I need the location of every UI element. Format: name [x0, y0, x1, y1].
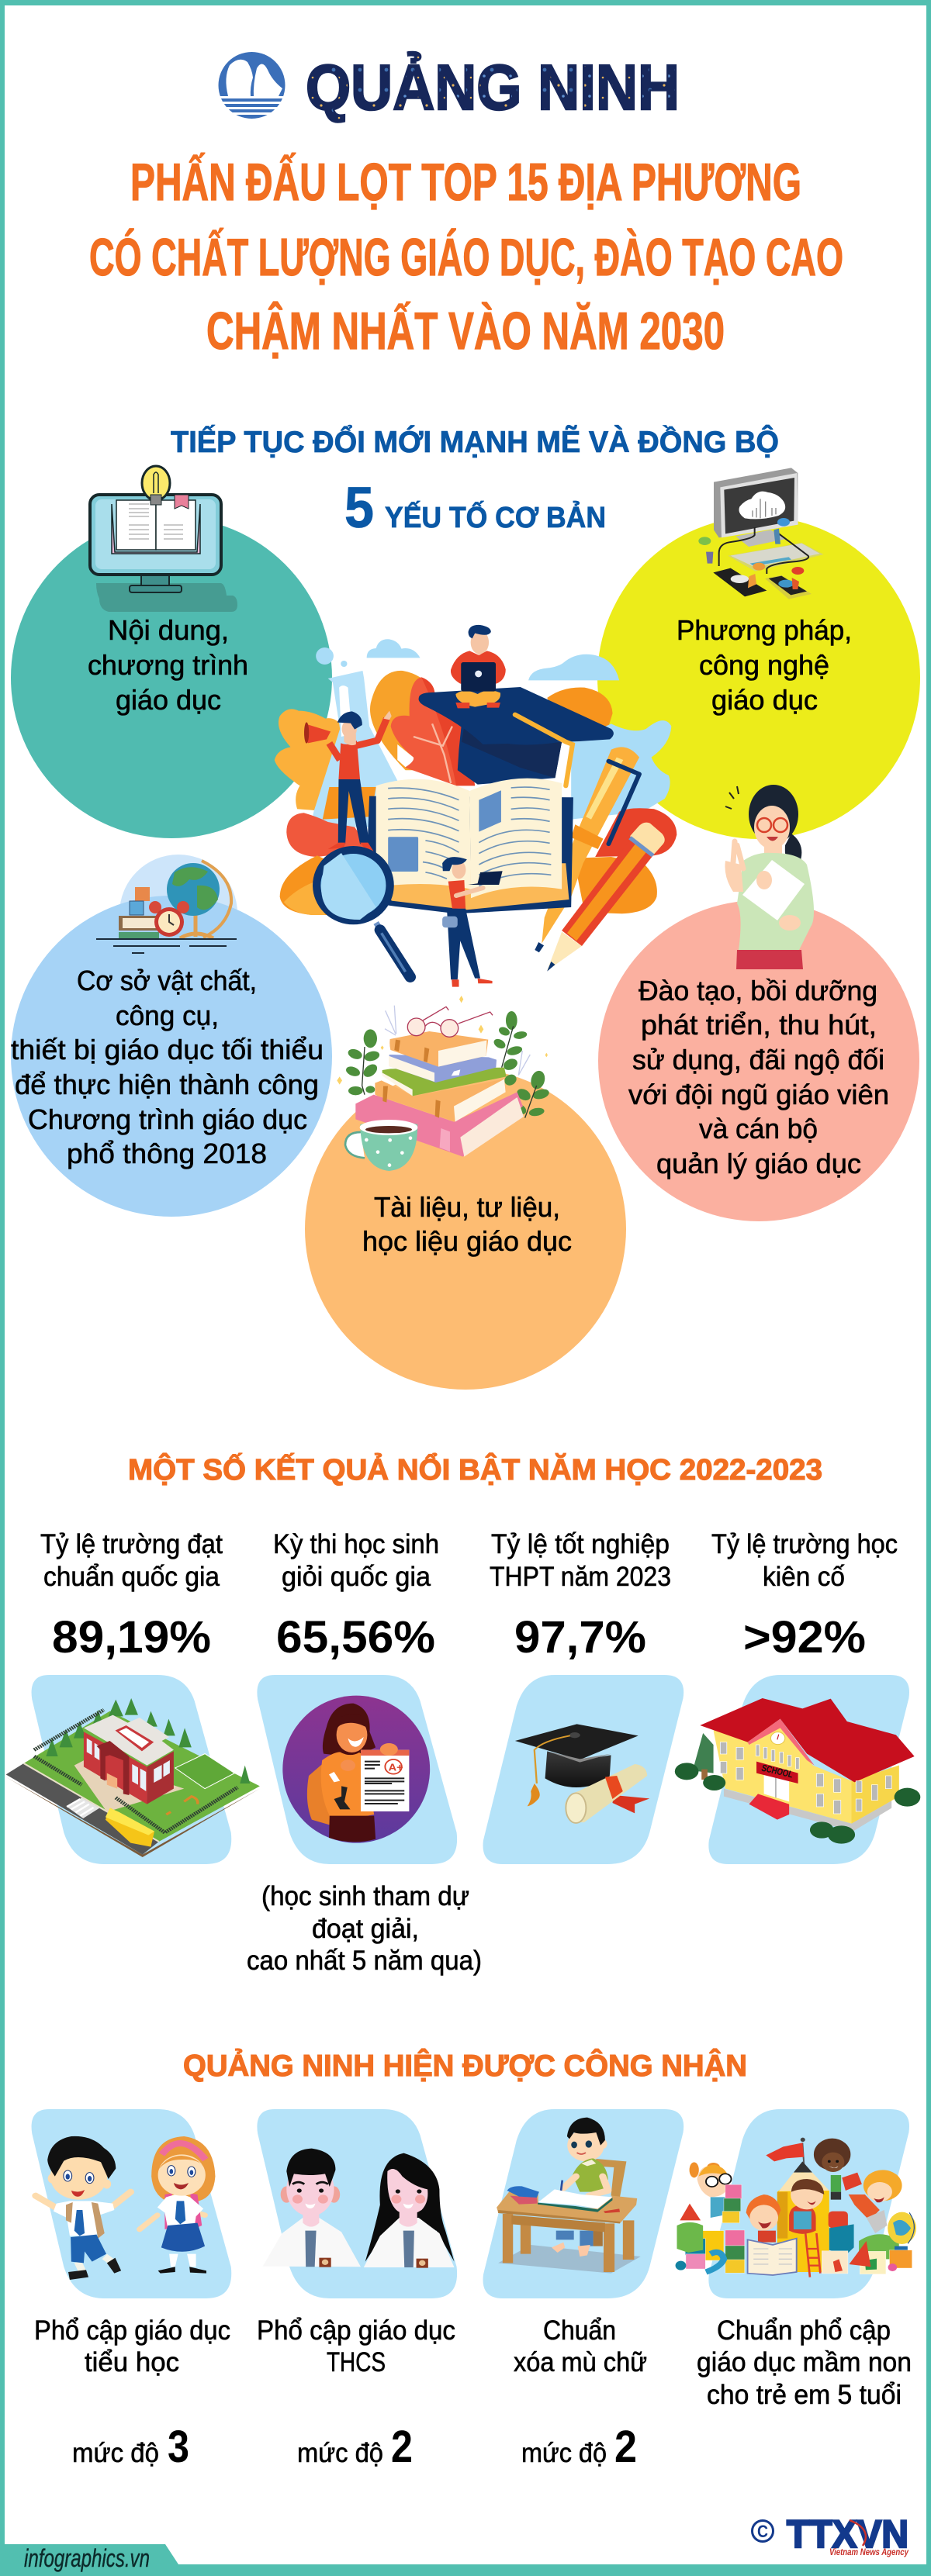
label: giỏi quốc gia: [282, 1562, 431, 1592]
label: Phổ cập giáo dục: [257, 2315, 455, 2346]
level: mức độ: [72, 2438, 159, 2468]
pen: [535, 747, 639, 952]
label: [514, 2315, 647, 2377]
label: Chuẩn: [543, 2315, 616, 2346]
note: (học sinh tham dự: [261, 1881, 469, 1911]
label: [490, 1529, 671, 1592]
label: tiểu học: [85, 2347, 179, 2377]
copyright mark: C: [757, 2522, 768, 2541]
person on cap with laptop: [451, 625, 506, 708]
level: [297, 2422, 413, 2472]
icon: globe, books and clock: [96, 861, 237, 953]
illustration: kids with toy blocks: [676, 2109, 916, 2298]
subheading: TIẾP TỤC ĐỔI MỚI MẠNH MẼ VÀ ĐỒNG BỘ: [171, 424, 779, 459]
note: đoạt giải,: [312, 1914, 419, 1944]
text: phương pháp: giáo dục: [711, 684, 818, 716]
stat: trường kiên cố: [675, 1529, 920, 1864]
level: 2: [614, 2422, 637, 2472]
globe accent: [850, 2520, 866, 2546]
level: [521, 2422, 637, 2472]
level: 2: [391, 2422, 413, 2472]
person with tablet: [442, 857, 503, 987]
text: cơ sở vật chất: Cơ sở vật chất,: [77, 965, 257, 996]
circle: teal: [11, 517, 332, 838]
text: đào tạo: phát triển, thu hút,: [641, 1009, 877, 1041]
magnifying glass: [317, 850, 410, 977]
wordmark: TTXVN: [787, 2512, 909, 2556]
label: THCS: [327, 2347, 386, 2377]
circle: salmon: [598, 900, 919, 1221]
text: phương pháp: công nghệ: [699, 649, 829, 681]
label: [257, 2315, 455, 2377]
label: kiên cố: [763, 1562, 845, 1592]
illustration: primary pupils: [32, 2109, 231, 2298]
subheading: YẾU TỐ CƠ BẢN: [385, 499, 606, 534]
recognition: tiểu học: [32, 2109, 231, 2472]
text: tài liệu: [362, 1191, 572, 1257]
label: Kỳ thi học sinh: [273, 1529, 439, 1559]
text: cơ sở vật chất: thiết bị giáo dục tối thiểu: [11, 1034, 324, 1065]
section heading: kết quả nổi bật: MỘT SỐ KẾT QUẢ NỔI BẬT NĂM HỌC 2022-2023: [128, 1452, 822, 1487]
label: cho trẻ em 5 tuổi: [707, 2380, 902, 2410]
icon: computer and devices: [698, 468, 824, 599]
panel: cơ sở vật chất: [11, 855, 332, 1217]
number: >92%: [743, 1612, 866, 1663]
level: 3: [168, 2422, 189, 2472]
illustration: school building: [675, 1675, 920, 1864]
note: cao nhất 5 năm qua): [247, 1946, 482, 1976]
illustration: student holding test: A+: [389, 1762, 403, 1773]
panel: tài liệu: [305, 996, 626, 1390]
recognition: THCS: [257, 2109, 457, 2472]
section heading: được công nhận: QUẢNG NINH HIỆN ĐƯỢC CÔNG NHẬN: [183, 2048, 747, 2083]
level: mức độ: [521, 2438, 607, 2468]
text: đào tạo: sử dụng, đãi ngộ đối: [632, 1044, 884, 1076]
recognition: xóa mù chữ: [483, 2109, 684, 2472]
subheading: 5: [344, 475, 374, 540]
title: [89, 152, 843, 361]
label: chuẩn quốc gia: [43, 1562, 220, 1592]
label: [697, 2315, 912, 2410]
panel: phương pháp công nghệ: [597, 468, 920, 839]
site name: infographics.vn: [24, 2544, 150, 2572]
text: nội dung: Nội dung,: [108, 614, 229, 646]
icon: monitor with book: [90, 466, 237, 612]
stat: học sinh giỏi: [247, 1529, 482, 1976]
stat: trường đạt chuẩn: [6, 1529, 260, 1864]
copyright mark: [753, 2520, 773, 2542]
label: giáo dục mầm non: [697, 2347, 912, 2377]
text: nội dung: [88, 614, 248, 716]
footer tab: [0, 2544, 926, 2576]
text: cơ sở vật chất: để thực hiện thành công: [15, 1069, 319, 1100]
illustration: secondary students: [257, 2109, 457, 2298]
panel: nội dung chương trình: [11, 466, 332, 838]
label: THPT năm 2023: [490, 1562, 671, 1592]
agency name: Vietnam News Agency: [829, 2548, 909, 2557]
label: Tỷ lệ tốt nghiệp: [491, 1529, 670, 1559]
pencil: [547, 823, 665, 972]
number: 65,56%: [276, 1612, 435, 1663]
stat: tốt nghiệp THPT: [483, 1529, 684, 1864]
text: nội dung: chương trình: [88, 649, 248, 681]
label: [711, 1529, 898, 1592]
label: Tỷ lệ trường học: [711, 1529, 898, 1559]
central illustration: book, graduation cap, people: [275, 625, 677, 987]
illustration: school campus: [6, 1675, 260, 1864]
level: [72, 2422, 189, 2472]
icon: Quảng Ninh emblem: [219, 52, 286, 119]
recognition: mầm non: [676, 2109, 916, 2410]
circle: light blue top: [119, 855, 237, 972]
illustration: boy at desk: [483, 2109, 684, 2298]
logo wordmark: QUẢNG NINH: [306, 50, 680, 123]
logo: TTXVN: [753, 2512, 909, 2557]
text: nội dung: giáo dục: [116, 684, 221, 716]
note: [247, 1881, 482, 1976]
text: đào tạo: quản lý giáo dục: [656, 1148, 861, 1179]
panel: đào tạo bồi dưỡng: [598, 785, 919, 1221]
text: phương pháp: Phương pháp,: [677, 614, 852, 646]
illustration: graduation cap and diploma: [483, 1675, 684, 1864]
icon: book stack with cup: [337, 996, 550, 1171]
text: đào tạo: và cán bộ: [699, 1113, 818, 1145]
label: Tỷ lệ trường đạt: [40, 1529, 223, 1559]
text: đào tạo: với đội ngũ giáo viên: [628, 1079, 889, 1110]
open book: [365, 779, 573, 913]
icon: teacher: [725, 785, 814, 969]
label: [34, 2315, 230, 2377]
text: cơ sở vật chất: Chương trình giáo dục: [28, 1103, 307, 1135]
label: Phổ cập giáo dục: [34, 2315, 230, 2346]
circle: yellow: [597, 516, 920, 839]
text: tài liệu: Tài liệu, tư liệu,: [374, 1191, 560, 1223]
subheading: [171, 424, 779, 540]
illustration: student holding test: [257, 1675, 457, 1864]
text: đào tạo: [628, 975, 889, 1179]
graduation cap: [419, 687, 614, 786]
logo: Quảng Ninh: [219, 50, 680, 123]
text: cơ sở vật chất: phổ thông 2018: [67, 1138, 267, 1169]
level: mức độ: [297, 2438, 383, 2468]
text: tài liệu: học liệu giáo dục: [362, 1225, 572, 1257]
text: cơ sở vật chất: công cụ,: [116, 1000, 219, 1031]
label: [40, 1529, 223, 1592]
label: Chuẩn phổ cập: [717, 2315, 891, 2346]
text: đào tạo: Đào tạo, bồi dưỡng: [639, 975, 877, 1007]
label: xóa mù chữ: [514, 2347, 647, 2377]
circle: orange: [305, 1069, 626, 1390]
text: phương pháp: [677, 614, 852, 716]
text: cơ sở vật chất: [11, 965, 324, 1169]
circle: blue: [11, 896, 332, 1217]
number: 97,7%: [514, 1612, 646, 1663]
number: 89,19%: [52, 1612, 211, 1663]
label: [273, 1529, 439, 1592]
illustration: school building: SCHOOL: [760, 1763, 794, 1780]
title: CHẬM NHẤT VÀO NĂM 2030: [206, 301, 725, 361]
person with megaphone: [304, 711, 392, 853]
